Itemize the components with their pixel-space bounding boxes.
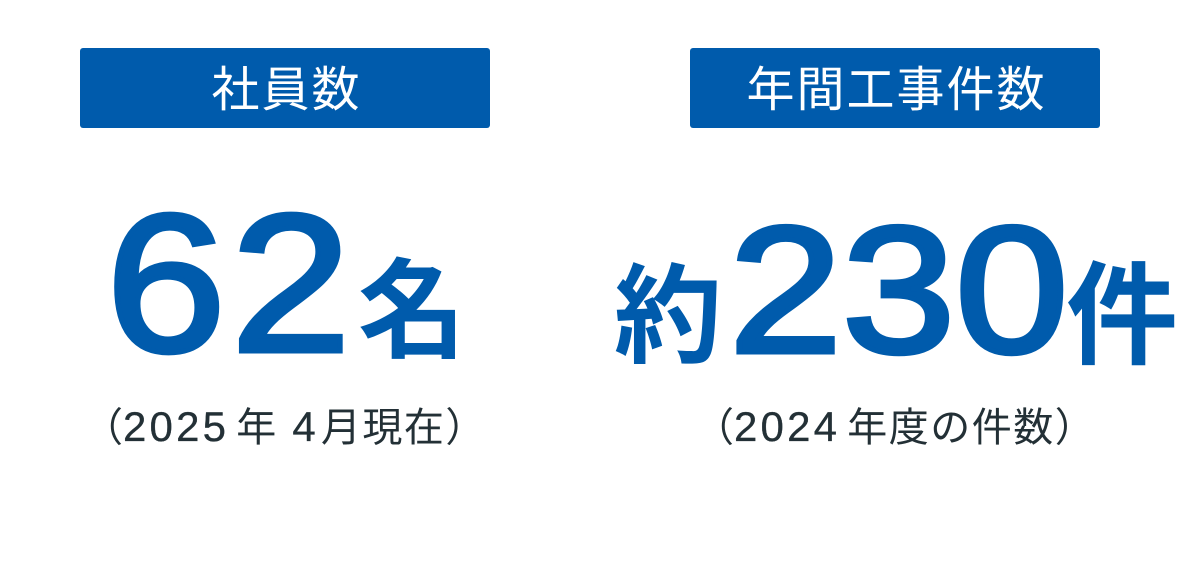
heading: employees — [80, 48, 490, 128]
unit: cases: 件 — [1066, 254, 1178, 379]
panel: annual works — [614, 48, 1178, 450]
prefix: approx: 約 — [614, 256, 722, 377]
number: 230: 230 — [729, 190, 1068, 391]
note: FY2024 cases: （2024年度の件数） — [694, 403, 1096, 450]
note: as of April 2025: （2025年 4月現在） — [83, 403, 487, 450]
heading: annual works: 年間工事件数 — [746, 64, 1046, 117]
heading: employees: 社員数 — [211, 64, 362, 117]
number: 62: 62 — [106, 174, 355, 393]
panel: employees — [80, 48, 490, 450]
unit: people: 名 — [358, 251, 466, 372]
heading: annual works — [690, 48, 1100, 128]
